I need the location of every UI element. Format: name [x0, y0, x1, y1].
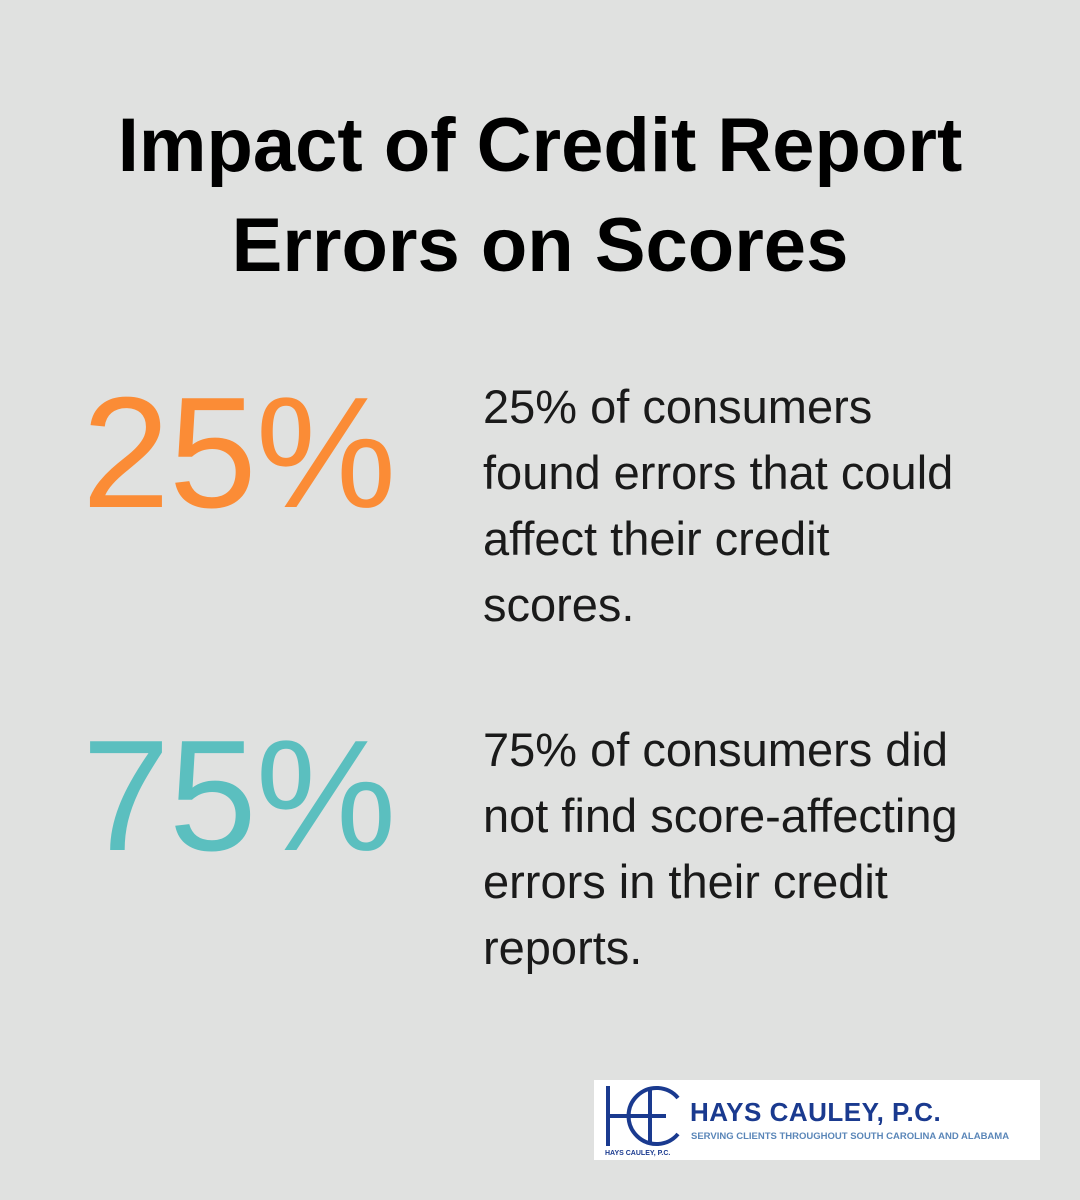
text: 75% description: [483, 723, 958, 974]
text: 25% description: 25% of consumers: [483, 380, 872, 433]
text: 75% description: not find score-affecting: [483, 789, 958, 842]
text: 25% description: [483, 380, 953, 631]
text: 25% description: affect their credit: [483, 512, 830, 565]
stat: 75%: 75%: [82, 708, 395, 884]
text: small name: HAYS CAULEY, P.C.: [605, 1150, 670, 1157]
title: [118, 103, 962, 288]
text: 25% description: found errors that could: [483, 446, 953, 499]
title: Errors on Scores: [232, 203, 848, 288]
logo: Hays Cauley: [594, 1080, 1040, 1160]
text: 75% description: reports.: [483, 921, 642, 974]
stat: 25%: 25%: [82, 365, 395, 541]
text: tagline: SERVING CLIENTS THROUGHOUT SOUTH CAROLINA AND ALABAMA: [691, 1131, 1009, 1142]
text: 75% description: errors in their credit: [483, 855, 888, 908]
text: 25% description: scores.: [483, 578, 634, 631]
title: Impact of Credit Report: [118, 103, 962, 188]
text: 75% description: 75% of consumers did: [483, 723, 948, 776]
text: company name: HAYS CAULEY, P.C.: [690, 1097, 941, 1127]
icon: HC monogram: [606, 1086, 680, 1146]
